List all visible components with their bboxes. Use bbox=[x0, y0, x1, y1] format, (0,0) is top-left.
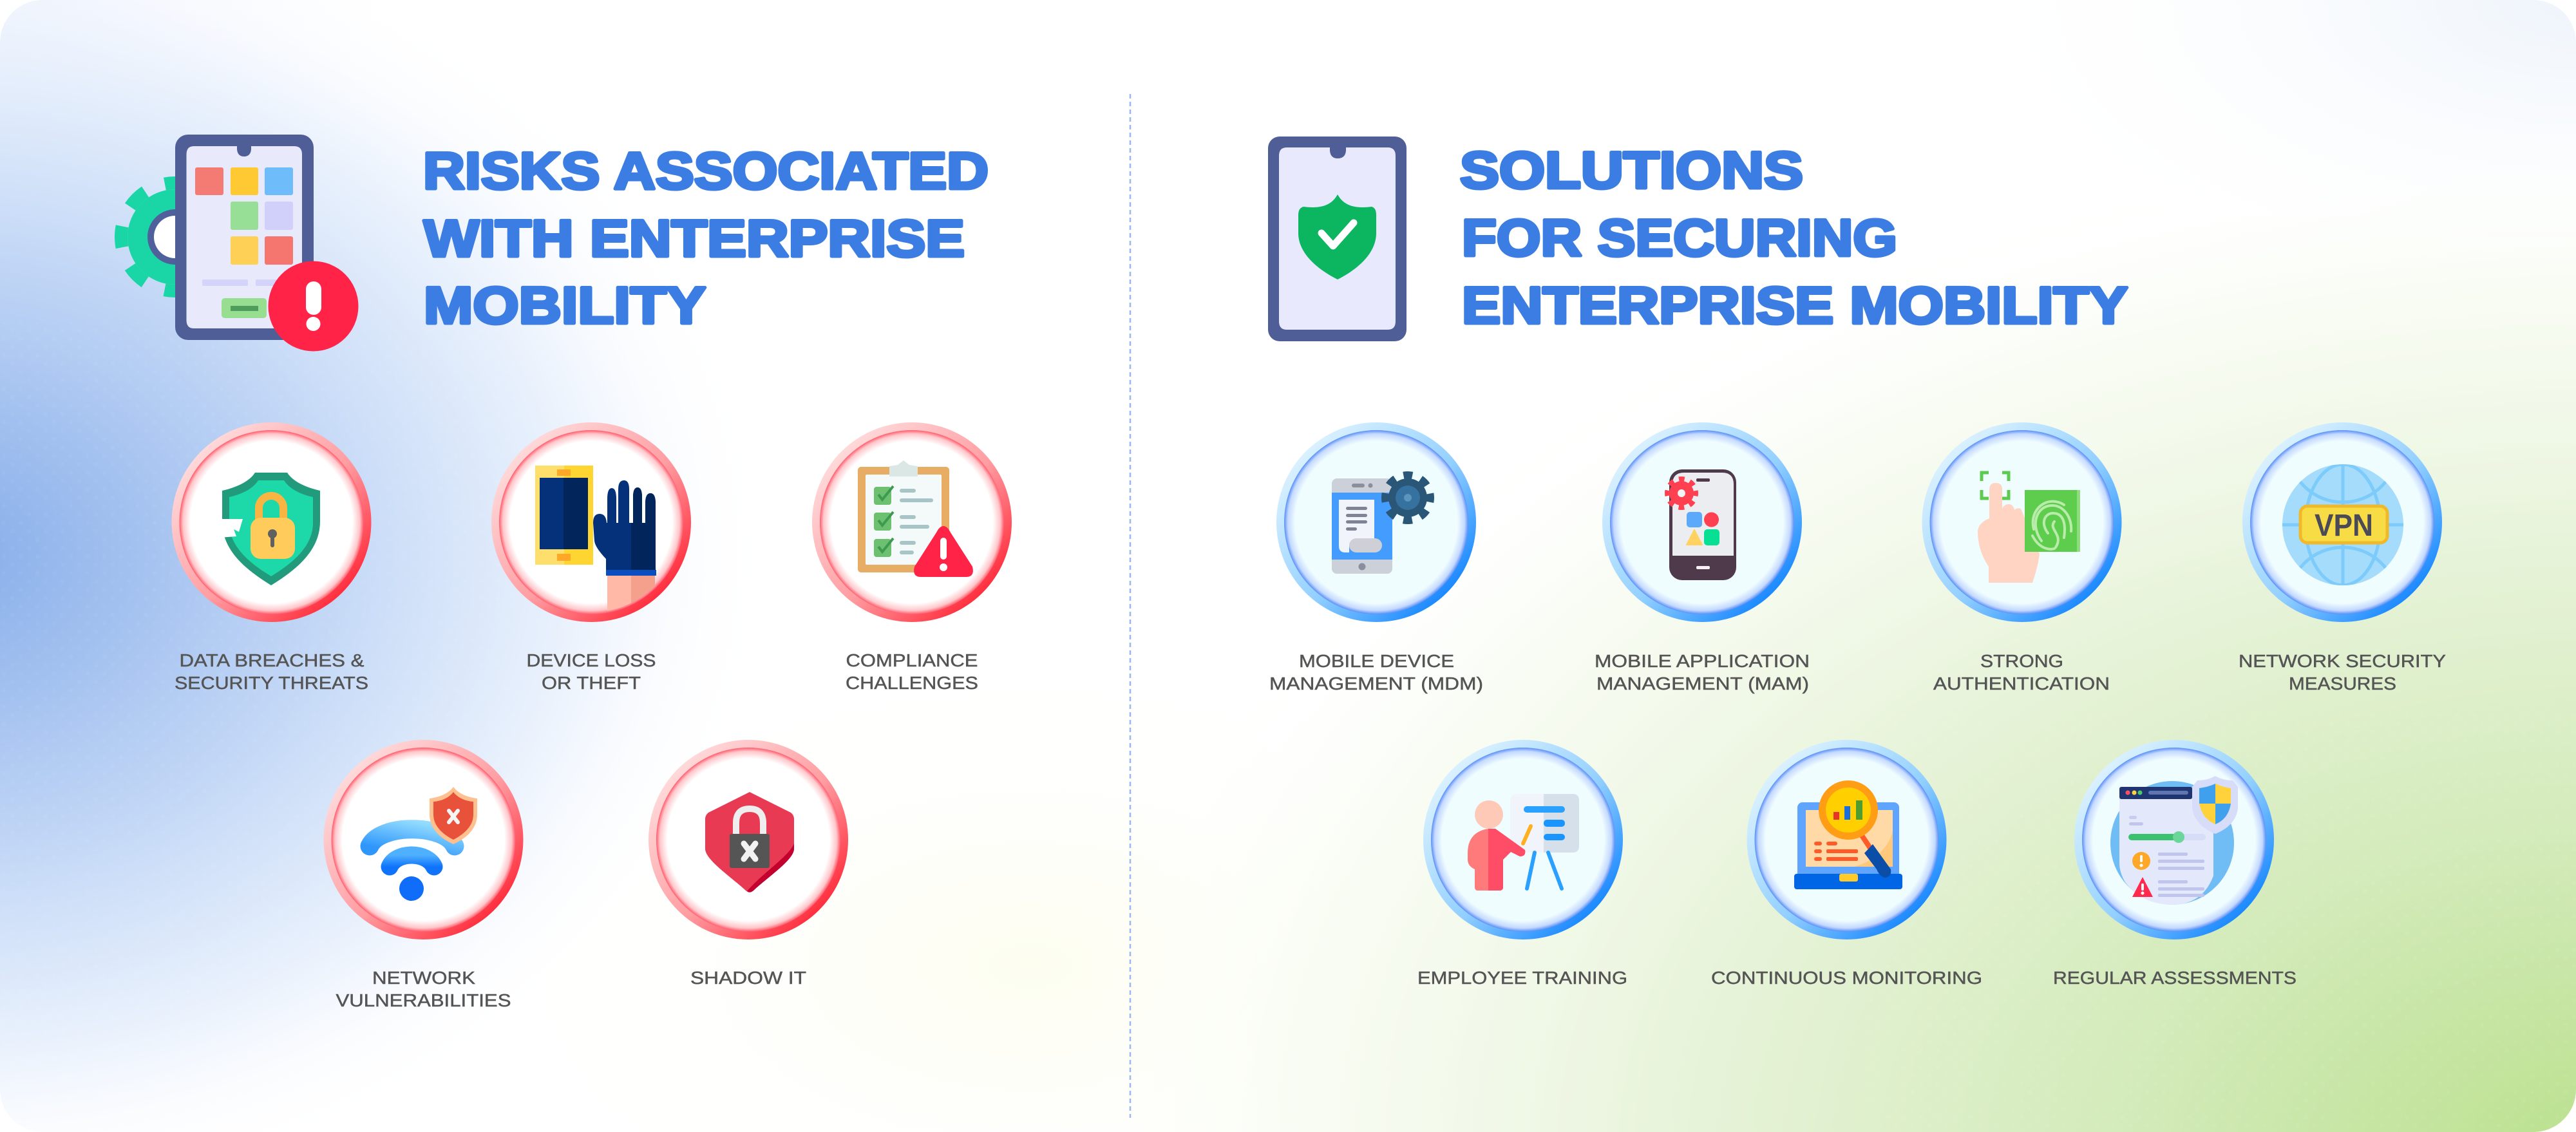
label: STRONG bbox=[1980, 651, 2063, 671]
divider bbox=[1130, 94, 1131, 1118]
icon: laptop with magnifier bbox=[1794, 780, 1902, 889]
icon: red shield with padlock bbox=[705, 792, 794, 892]
heading: risks: WITH ENTERPRISE bbox=[424, 210, 965, 268]
icon: presenter at board bbox=[1468, 794, 1579, 891]
heading: solutions bbox=[1460, 142, 2128, 335]
icon: clipboard with warning bbox=[858, 460, 973, 577]
heading: solutions: SOLUTIONS bbox=[1460, 142, 1803, 200]
item: employee training bbox=[1417, 740, 1627, 988]
label bbox=[1269, 651, 1483, 693]
label: NETWORK SECURITY bbox=[2239, 651, 2446, 671]
label: VULNERABILITIES bbox=[336, 990, 511, 1010]
label: DEVICE LOSS bbox=[527, 650, 656, 670]
heading: solutions: ENTERPRISE MOBILITY bbox=[1462, 277, 2128, 335]
label: SHADOW IT bbox=[690, 968, 806, 988]
heading: solutions: FOR SECURING bbox=[1462, 209, 1897, 267]
icon: cracked shield with lock bbox=[219, 473, 320, 585]
icon: report with shield bbox=[2110, 776, 2238, 905]
label: EMPLOYEE TRAINING bbox=[1417, 968, 1627, 988]
icon: globe with vpn badge: VPN bbox=[2315, 509, 2373, 543]
item: network security bbox=[2240, 422, 2446, 690]
item: regular assessments bbox=[2053, 740, 2297, 988]
label: SECURITY THREATS bbox=[175, 673, 368, 693]
label: REGULAR ASSESSMENTS bbox=[2053, 968, 2297, 988]
heading: risks: RISKS ASSOCIATED bbox=[423, 142, 989, 200]
label: MOBILE APPLICATION bbox=[1595, 651, 1810, 671]
icon: phone with shield bbox=[1268, 137, 1406, 341]
icon: phone with gear and alert bbox=[121, 135, 358, 352]
item: compliance bbox=[812, 422, 1012, 693]
label: MANAGEMENT (MDM) bbox=[1269, 674, 1483, 693]
panel: risks bbox=[121, 135, 1012, 1010]
icon: hand grabbing phone bbox=[535, 466, 656, 614]
item: mdm bbox=[1269, 422, 1483, 693]
label: MANAGEMENT (MAM) bbox=[1596, 674, 1809, 693]
label: NETWORK bbox=[372, 968, 475, 988]
heading: risks bbox=[423, 142, 989, 335]
label bbox=[846, 650, 978, 693]
icon: phone with apps bbox=[1667, 469, 1736, 580]
icon: globe with vpn badge bbox=[2282, 464, 2403, 585]
label: OR THEFT bbox=[542, 673, 641, 693]
label bbox=[527, 650, 656, 693]
label: AUTHENTICATION bbox=[1933, 674, 2110, 693]
item: strong authentication bbox=[1922, 422, 2121, 693]
icon: wifi with shield bbox=[370, 787, 477, 901]
item: mam bbox=[1595, 422, 1810, 693]
label: COMPLIANCE bbox=[846, 650, 978, 670]
item: shadow it bbox=[649, 740, 848, 988]
label bbox=[1933, 651, 2110, 693]
label: CONTINUOUS MONITORING bbox=[1711, 968, 1982, 988]
icon: finger and fingerprint bbox=[1978, 473, 2080, 583]
label: DATA BREACHES & bbox=[179, 650, 365, 670]
heading: risks: MOBILITY bbox=[424, 277, 706, 335]
item: device loss bbox=[491, 422, 691, 693]
item: data breaches bbox=[171, 422, 371, 693]
label bbox=[1595, 651, 1810, 693]
label: MEASURES bbox=[2289, 674, 2396, 693]
item: network vulnerabilities bbox=[323, 740, 523, 1010]
icon: phone with gear bbox=[1332, 476, 1430, 574]
item: continuous monitoring bbox=[1711, 740, 1982, 988]
label bbox=[175, 650, 368, 693]
label bbox=[336, 968, 511, 1010]
label: CHALLENGES bbox=[846, 673, 978, 693]
panel: solutions bbox=[1268, 137, 2446, 988]
label bbox=[2239, 651, 2446, 693]
label: MOBILE DEVICE bbox=[1299, 651, 1454, 671]
